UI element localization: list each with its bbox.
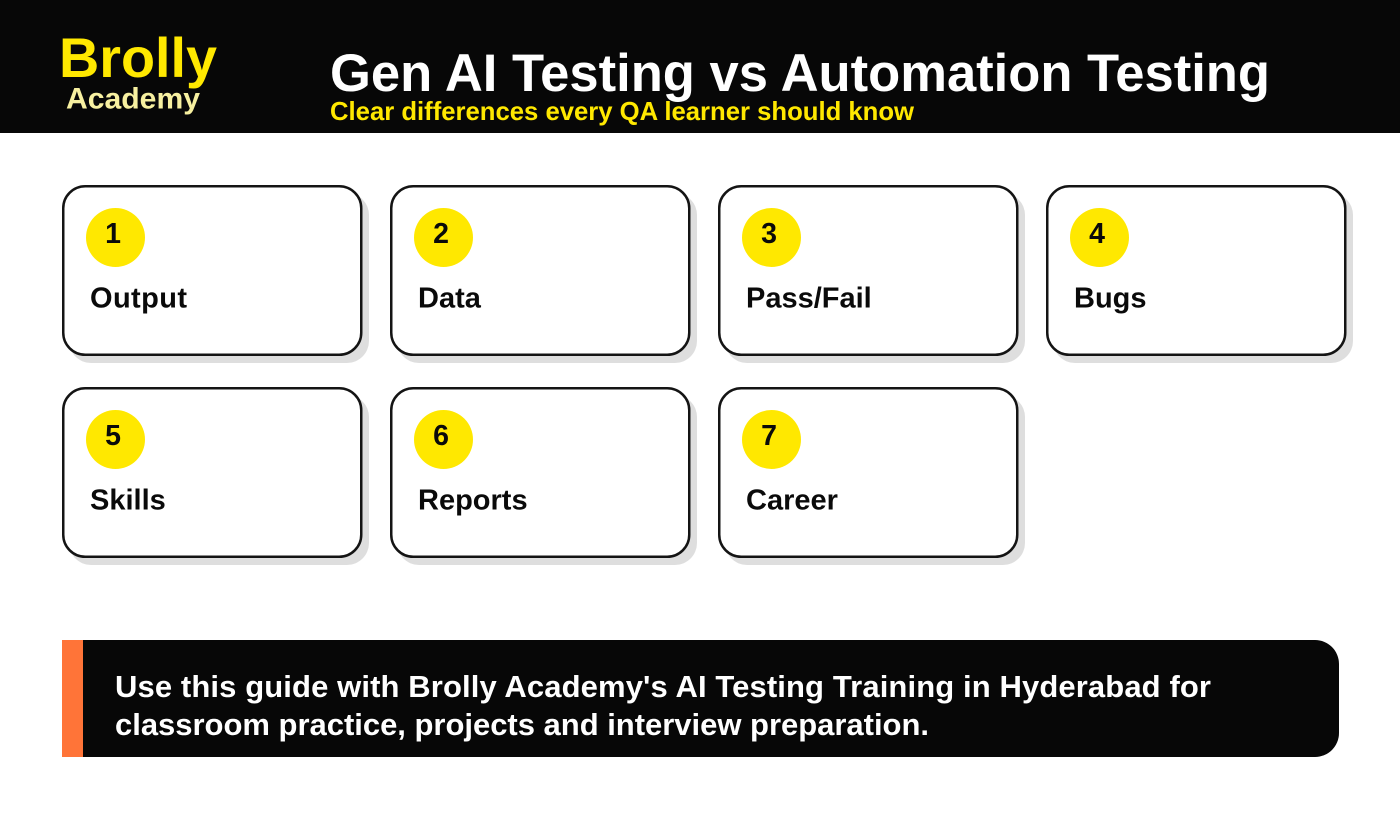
card 3: Pass/Fail: Pass/Fail [746,282,872,314]
card 2: Data [391,186,697,363]
footer callout [62,640,1339,757]
header band [0,0,1400,133]
card 7: Career [719,388,1025,565]
card 6: Reports [391,388,697,565]
card 5: Skills: Skills [90,484,166,516]
card 6: Reports: 6 [433,420,449,452]
logo: Brolly Academy: Brolly [59,26,217,89]
callout text [115,669,1211,742]
logo: Brolly Academy: Academy [66,82,200,116]
card 2: Data: Data [418,282,482,314]
callout text: Use this guide with Brolly Academy's AI Testing Training in Hyderabad for [115,669,1211,704]
card 1: Output: 1 [105,218,121,250]
callout text: classroom practice, projects and interview preparation. [115,707,929,742]
card 1: Output [63,186,369,363]
card 6: Reports: Reports [418,484,528,516]
card 4: Bugs: 4 [1089,218,1105,250]
orange accent bar [62,640,83,757]
subtitle: Clear differences every QA learner should know [330,98,915,126]
card 3: Pass/Fail [719,186,1025,363]
card 7: Career: Career [746,484,838,516]
card 4: Bugs [1047,186,1353,363]
card 5: Skills [63,388,369,565]
card 3: Pass/Fail: 3 [761,218,777,250]
card 7: Career: 7 [761,420,777,452]
card 2: Data: 2 [433,218,449,250]
card 4: Bugs: Bugs [1074,282,1146,314]
title: Gen AI Testing vs Automation Testing [330,44,1270,103]
card 1: Output: Output [90,282,187,314]
card 5: Skills: 5 [105,420,121,452]
